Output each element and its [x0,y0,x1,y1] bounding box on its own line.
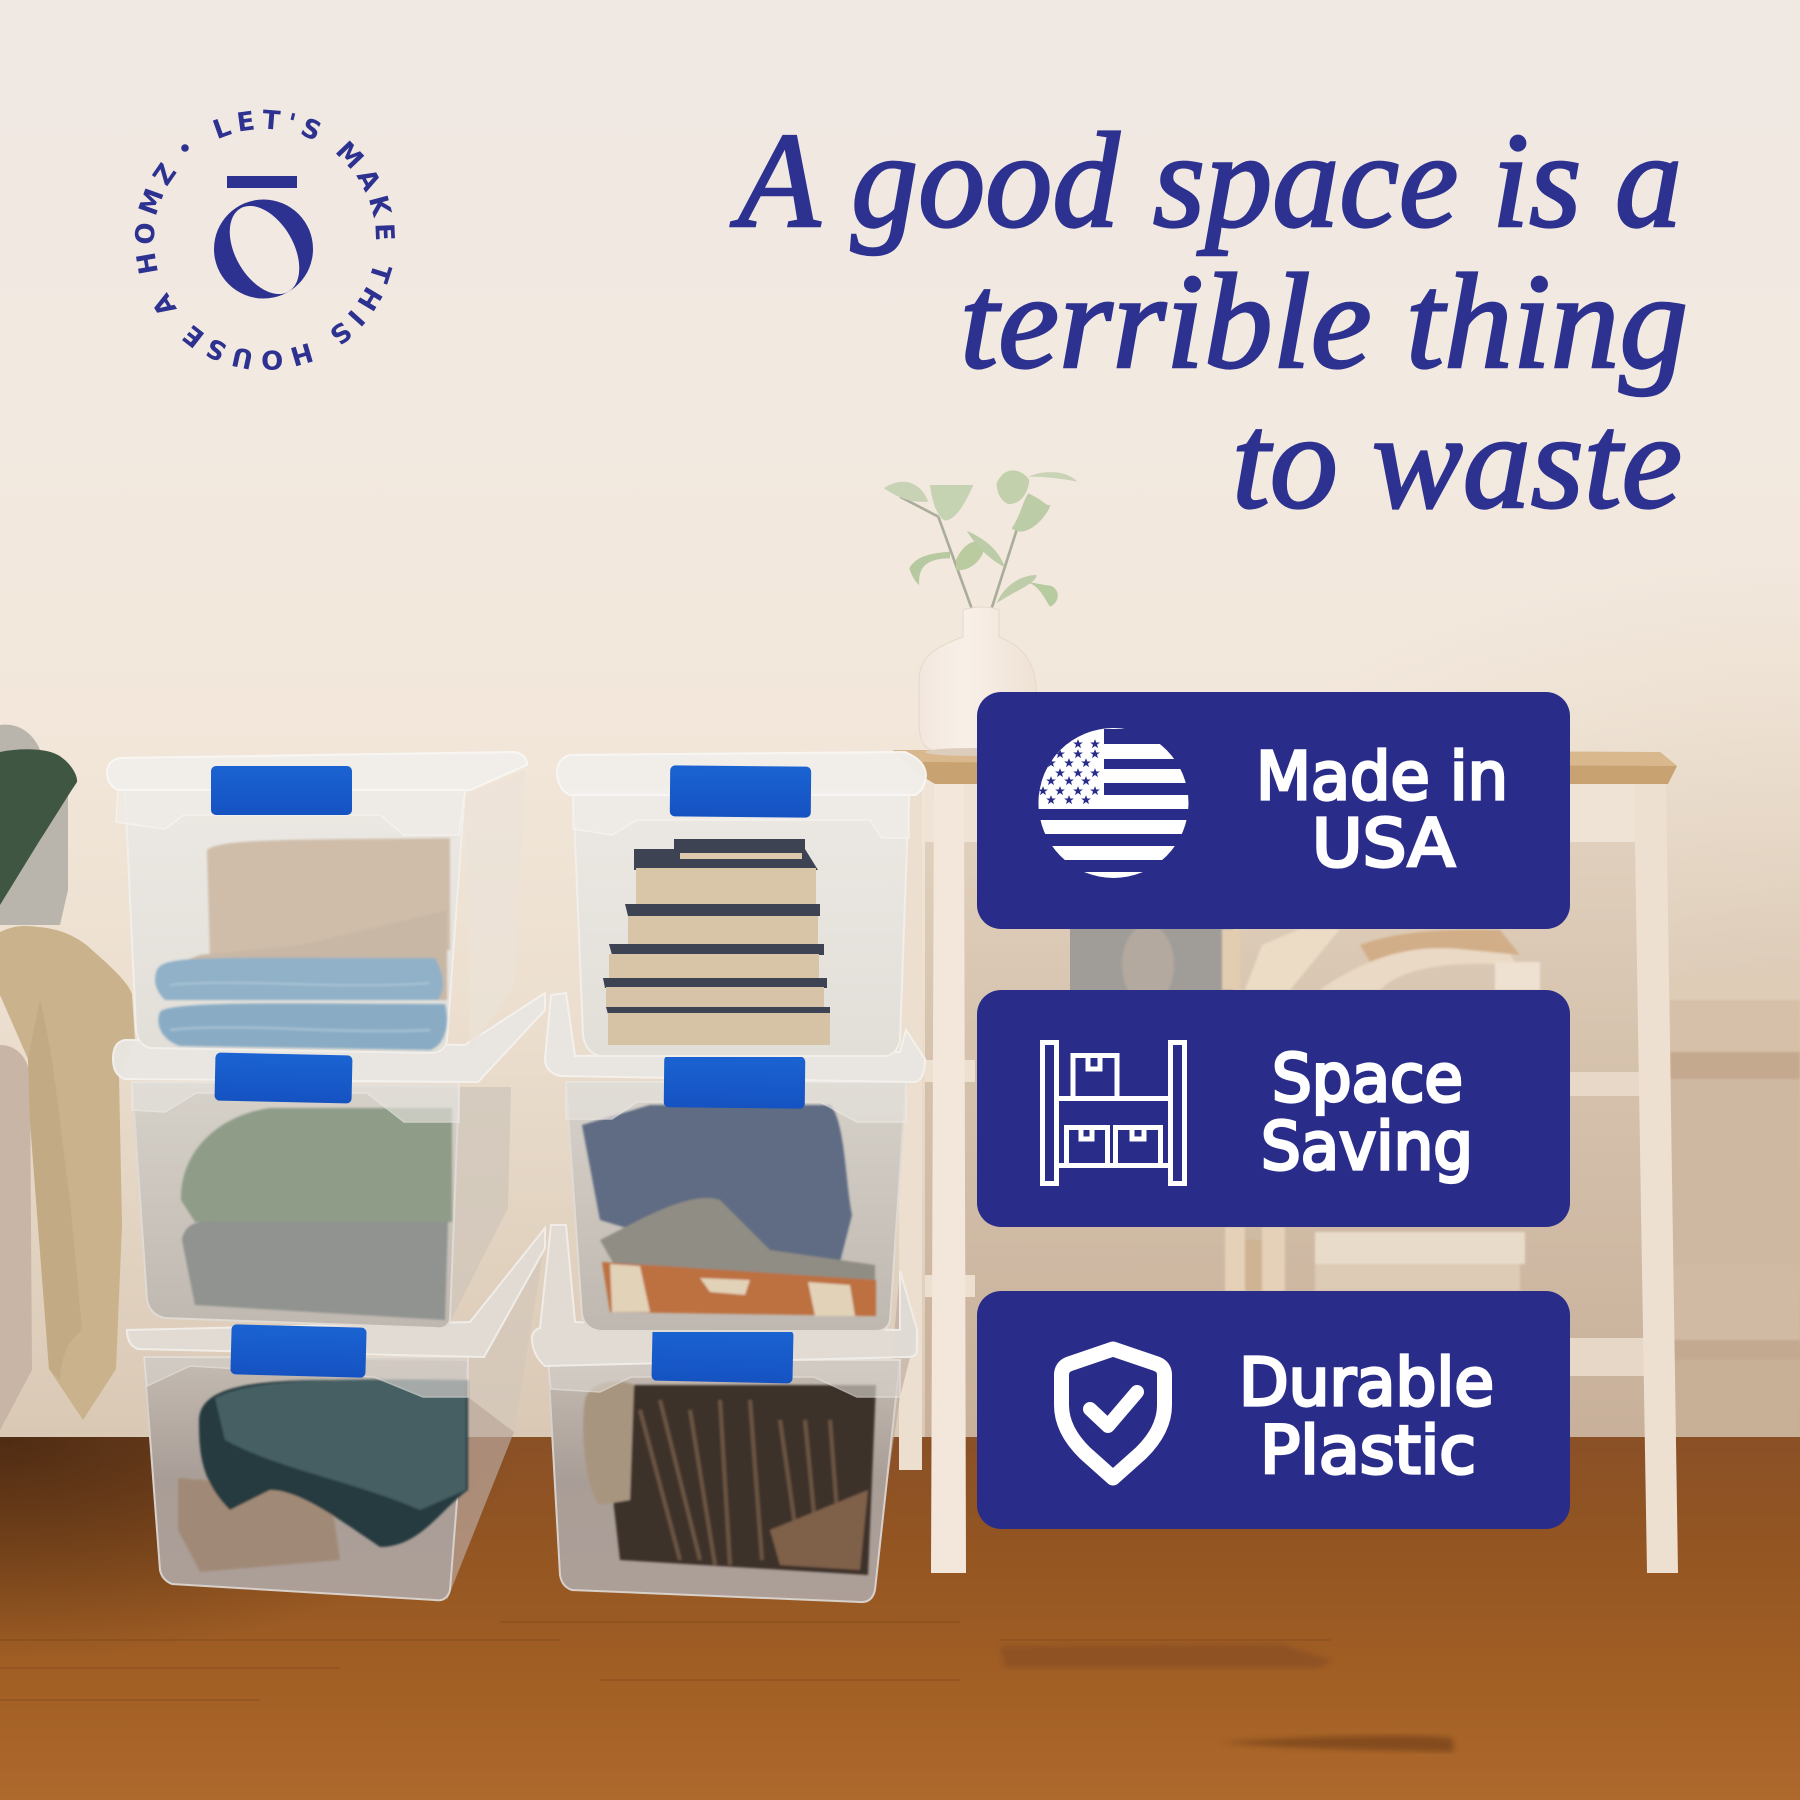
panel: made in USA [977,692,1570,929]
side table with plant vase [893,750,1678,1573]
label: Space [1272,1040,1463,1117]
box middle-left [113,993,545,1328]
box top-right [557,752,926,1056]
lid [557,752,926,795]
sofa arm [0,1045,32,1430]
table top [893,750,1677,784]
latch [651,1328,794,1383]
front right leg [1634,784,1678,1573]
headline: A good space is a [730,106,1682,256]
headline [730,106,1688,537]
contents: knit [583,1381,876,1575]
lid [532,1225,917,1366]
box bottom-left [127,1228,545,1600]
icon: shelf with boxes [1042,1042,1184,1184]
latch [230,1324,367,1378]
circular text: LET'S MAKE THIS HOUSE A HOMZ [134,110,395,370]
icon: shield with check [1062,1349,1164,1478]
latch [664,1055,805,1109]
latch [211,766,352,815]
latch [215,1053,352,1103]
side wall [447,1087,511,1328]
floor [0,1437,1800,1800]
body [132,1082,459,1328]
headline: terrible thing [960,247,1688,397]
lid [107,752,527,790]
grey cushion [0,725,68,925]
latch [670,765,811,818]
lid skirt [573,790,909,838]
lid skirt [548,1360,900,1397]
contents: teal and beige [178,1379,468,1572]
body [144,1357,468,1600]
body [548,1360,900,1602]
side wall [447,1397,514,1600]
contents: folded blankets [181,1108,452,1320]
body [125,790,465,1053]
box middle-right [545,993,925,1331]
vase [919,607,1037,756]
body [566,1082,906,1331]
front left leg [931,784,966,1573]
contents: books [603,839,830,1045]
icon: US flag [1038,726,1190,880]
green pillow [0,749,77,905]
label [1261,1040,1473,1185]
panel: durable plastic [977,1291,1570,1529]
lid [127,1228,545,1357]
logo badge [134,110,395,370]
background: wall [0,0,1800,1440]
lid [545,993,925,1082]
label: Plastic [1260,1412,1476,1489]
label: Durable [1239,1344,1494,1421]
lid skirt [566,1082,906,1122]
throw blanket [0,926,135,1420]
lid skirt [116,790,465,835]
side wall [870,1270,917,1601]
logo mark [214,176,314,306]
wall moulding right [1670,975,1800,1438]
label [1256,738,1508,882]
plant [884,470,1077,608]
label: Made in [1256,738,1508,815]
shelf rails [925,1060,1650,1376]
contents: sweaters [582,1105,876,1316]
headline: to waste [1232,387,1682,537]
apron [925,784,1645,842]
sofa with pillow and throw [0,725,135,1430]
lid skirt [132,1082,459,1122]
box top-left [107,752,527,1053]
contents: beige and blue towels [155,838,450,1050]
panel: space saving [977,990,1570,1227]
lid skirt [144,1357,468,1397]
label [1239,1344,1494,1489]
body [573,790,909,1056]
label: USA [1312,805,1455,882]
lid [113,993,545,1082]
side wall [465,770,525,1050]
label: Saving [1261,1108,1473,1185]
box bottom-right [532,1225,917,1602]
table recess behind shelves [925,785,1645,1437]
shelf objects [1222,929,1540,1291]
back left leg [899,780,922,1470]
